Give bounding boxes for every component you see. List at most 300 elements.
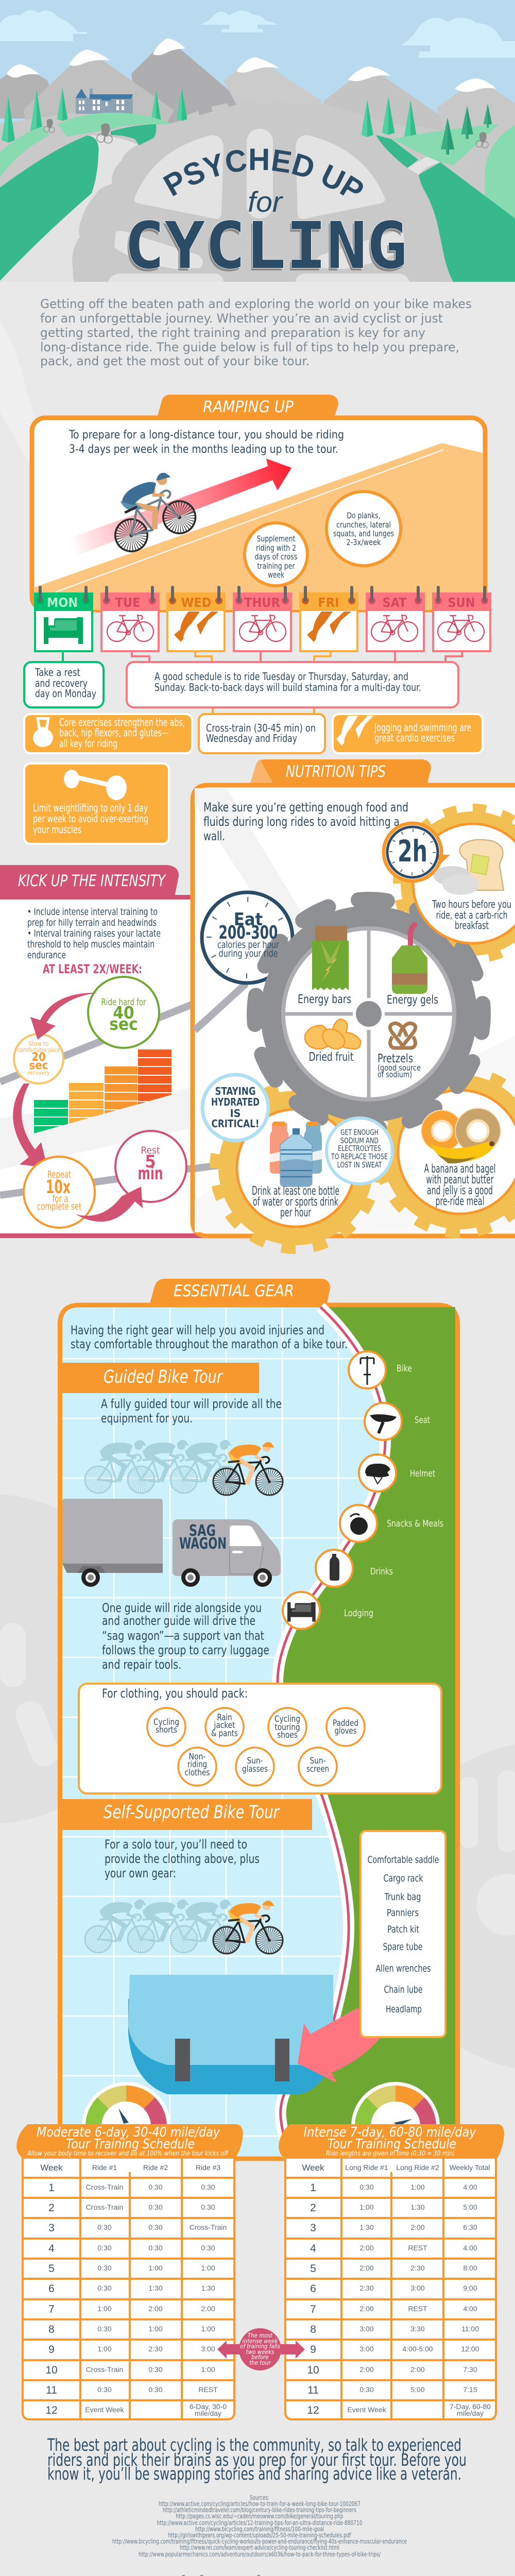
note: monday rest: [24, 662, 104, 707]
note: monday rest: and recovery: [35, 677, 88, 689]
calendar day: WED: WED: [181, 595, 211, 610]
table header: [40, 2163, 220, 2173]
label: pretzels: Pretzels: [377, 1052, 413, 1065]
banner: moderate schedule: Allow your body time to recover and be at 100% when the tour kicks off: [27, 2150, 229, 2158]
calendar day: MON: MON: [47, 595, 78, 610]
table rows: 1:30: [201, 2284, 215, 2292]
icon: pannier bag: [128, 1975, 333, 2094]
gear: bagel: [379, 1071, 515, 1233]
callout: cross training: riding with 2: [256, 543, 296, 553]
week numbers: 6: [310, 2283, 316, 2295]
table rows: REST: [198, 2385, 218, 2394]
week numbers: 11: [307, 2384, 319, 2396]
gauge: moderate: [82, 2082, 170, 2171]
callout: most intense week: The most: [248, 2332, 273, 2339]
clothing item: rain jacket: & pants: [211, 1728, 238, 1739]
table rows: 0:30: [97, 2264, 112, 2272]
table rows: 8:00: [463, 2264, 477, 2272]
icon: toast and eggs: [434, 840, 504, 895]
tip: cross-train: [199, 714, 325, 753]
week numbers: 4: [310, 2243, 316, 2255]
clothing item: padded gloves: [327, 1708, 365, 1746]
table rows: REST: [408, 2244, 427, 2252]
table rows: 0:30: [359, 2183, 374, 2191]
banner: moderate schedule: Moderate 6-day, 30-40 mile/day: [37, 2125, 220, 2140]
table rows: 4:00: [463, 2244, 477, 2252]
week numbers: 6: [48, 2283, 55, 2295]
text block: guided tour: A fully guided tour will provide all the: [101, 1397, 282, 1411]
panel: clothing list: For clothing, you should pack:: [102, 1686, 248, 1701]
tip: cross-train: Cross-train (30-45 min) on: [206, 722, 316, 734]
clothing item: cycling shorts: [147, 1708, 185, 1746]
subheading: at least 2x/week: AT LEAST 2X/WEEK:: [43, 962, 142, 976]
heading tab: kick up the intensity: KICK UP THE INTENSITY: [18, 872, 166, 890]
table rows: [347, 2183, 491, 2417]
gear inner: two hours before: [413, 824, 515, 943]
sources: http://girlswithgears.org/wp-content/uploads/25-50-mile-training-schedules.pdf: [168, 2532, 351, 2539]
table rows: 2:00: [148, 2304, 163, 2313]
week numbers: 9: [48, 2344, 55, 2355]
icon: hotel building: [76, 89, 133, 114]
icon: pretzel: [390, 1023, 416, 1048]
text: pre-ride meal: [424, 1162, 495, 1208]
text block: gear intro: Having the right gear will help you avoid injuries and: [71, 1323, 324, 1337]
text block: nutrition intro: wall.: [203, 829, 225, 843]
text block: guided tour: [101, 1397, 282, 1426]
step: repeat 10x: [24, 1157, 95, 1228]
text block: sag wagon: follows the group to carry luggage: [102, 1643, 269, 1657]
step: rest 5 min: [115, 1131, 186, 1202]
snowcaps: [7, 38, 496, 92]
label: energy gels: Energy gels: [387, 993, 438, 1007]
calendar day: THUR: [233, 592, 292, 651]
callout: cross training: days of cross: [254, 552, 298, 562]
step: rest 5 min: 5: [145, 1151, 156, 1172]
clothing item: touring shoes: touring: [275, 1722, 300, 1733]
title: [123, 148, 407, 286]
sky: [0, 0, 515, 124]
step: slow 20 sec: comfortable pace: [18, 1046, 60, 1054]
callout: sodium and electrolytes: LOST IN SWEAT: [337, 1160, 382, 1170]
sources: http://www.bicycling.com/training/fitness/quick-cycling-workouts-power-and-endurance/flying-40s-enhance-muscular-endurance: [112, 2538, 407, 2545]
table header: Ride #3: [196, 2163, 220, 2172]
table rows: 1:00: [97, 2345, 112, 2353]
tip: cardio: [333, 714, 483, 753]
table rows: 2:00: [410, 2223, 425, 2231]
panel: gear list: [360, 1831, 445, 2037]
callout: sodium and electrolytes: GET ENOUGH: [340, 1128, 379, 1137]
table: intense schedule: [285, 2158, 496, 2419]
callout: staying hydrated: HYDRATED: [211, 1096, 260, 1108]
text: eat calories: calories per hour: [217, 939, 280, 951]
week numbers: 8: [310, 2324, 316, 2335]
trees left: [2, 88, 187, 143]
note: monday rest: day on Monday: [35, 687, 96, 700]
callout: core exercises: 2-3x/week: [346, 537, 381, 547]
label: dried fruit: Dried fruit: [309, 1050, 353, 1064]
table rows: 3:00: [359, 2325, 374, 2333]
weekly calendar: [24, 587, 491, 716]
step: repeat 10x: 10x: [46, 1177, 71, 1198]
hero illustration: [0, 0, 515, 282]
label: energy bars: Energy bars: [298, 993, 351, 1006]
table rows: 2:30: [359, 2284, 374, 2292]
clothing item: non-riding clothes: Non-: [188, 1752, 206, 1762]
table rows: 2:00: [359, 2264, 374, 2272]
panel: nutrition tips: [193, 759, 515, 1249]
gear item: lodging: [283, 1592, 373, 1629]
label: pretzels: [377, 1052, 421, 1079]
table rows: mile/day: [195, 2409, 221, 2417]
table rows: 11:00: [461, 2325, 479, 2333]
tip: core exercises: back, hip flexors, and glutes—: [59, 726, 169, 739]
calendar binding pins: [37, 587, 488, 604]
icon: sag wagon van: [173, 1519, 281, 1587]
week numbers: 2: [48, 2202, 55, 2214]
callout: sodium and electrolytes: ELECTROLYTES: [338, 1144, 381, 1153]
closing text: [47, 2435, 467, 2484]
callout: staying hydrated: IS: [230, 1107, 241, 1120]
icon: cyclist group solo: [85, 1900, 283, 1954]
tip: cardio: great cardio exercises: [374, 732, 455, 744]
table rows: Event Week: [347, 2405, 387, 2414]
table rows: 7:15: [463, 2385, 477, 2394]
ramp: [35, 443, 483, 610]
clothing item: sunscreen: [299, 1748, 337, 1786]
table rows: 2:00: [359, 2365, 374, 2374]
week numbers: [45, 2182, 58, 2416]
tip: core exercises: [24, 714, 192, 753]
step: repeat 10x: complete set: [37, 1201, 81, 1212]
icon: truck trailer: [62, 1499, 163, 1587]
callout: sodium and electrolytes: [327, 1118, 392, 1184]
arrow: 20 sec to repeat: [13, 1083, 47, 1168]
icon: running legs: [336, 716, 374, 746]
sources: http://www.popularmechanics.com/adventure/outdoors/a6036/how-to-pack-for-three-types-of-bike-trips/: [139, 2551, 381, 2558]
sources: [112, 2494, 407, 2558]
table rows: 2:30: [148, 2345, 163, 2353]
panel: gear list: Trunk bag: [384, 1891, 421, 1903]
text block: interval training: [27, 906, 161, 961]
clothing item: non-riding clothes: riding: [187, 1759, 207, 1770]
title line: CYCLING: CYCLING: [124, 209, 407, 283]
callout: sodium and electrolytes: TO REPLACE THOSE: [331, 1152, 388, 1161]
week numbers: 8: [48, 2324, 55, 2335]
text: eat calories: Eat: [234, 909, 263, 930]
intro text: Getting off the beaten path and exploring the world on your bike makes: [40, 297, 472, 311]
clothing item: padded gloves: gloves: [335, 1726, 357, 1736]
table rows: 1:00: [148, 2325, 163, 2333]
calendar day: TUE: TUE: [115, 595, 140, 610]
text block: gear intro: [71, 1323, 348, 1351]
text block: sag wagon: [102, 1601, 269, 1672]
table rows: 2:00: [359, 2304, 374, 2313]
week numbers: 5: [48, 2263, 55, 2275]
step: repeat 10x: Repeat: [47, 1169, 71, 1180]
gear: two hours before: [398, 808, 515, 959]
table rows: mile/day: [457, 2409, 484, 2417]
table rows: 4:00-5:00: [402, 2345, 433, 2353]
week numbers: 4: [48, 2243, 55, 2255]
table rows: 4:00: [463, 2304, 477, 2313]
clothing item: sunglasses: Sun-: [247, 1756, 263, 1766]
callout: core exercises: [327, 492, 401, 566]
banner: self-supported bike tour: [62, 1799, 312, 1830]
background chainring: [0, 103, 489, 282]
text block: solo tour: For a solo tour, you’ll need to: [105, 1837, 247, 1852]
step: ride hard 40 sec: Ride hard for: [101, 997, 146, 1008]
text: drink water: Drink at least one bottle: [252, 1184, 339, 1198]
table rows: 3:30: [410, 2325, 425, 2333]
panel: clothing list: [79, 1684, 441, 1793]
clothing item: sunscreen: Sun-: [310, 1756, 325, 1766]
icon: bagels and banana: [421, 1108, 501, 1163]
week numbers: 7: [48, 2303, 55, 2315]
table rows: 2:00: [201, 2304, 215, 2313]
table header: Ride #2: [143, 2163, 168, 2172]
week numbers: [307, 2182, 319, 2416]
icon: sag wagon van: WAGON: [179, 1535, 227, 1553]
table header: Weekly Total: [450, 2163, 490, 2172]
table rows: 6-Day, 30-0: [190, 2402, 227, 2411]
clock: 2h: 2h: [398, 834, 427, 869]
week numbers: 1: [48, 2182, 55, 2194]
step: slow 20 sec: Slow to: [28, 1040, 49, 1047]
step: slow 20 sec: 20: [31, 1051, 46, 1064]
text: drink water: of water or sports drink: [253, 1195, 338, 1209]
gear item: snacks: [340, 1505, 443, 1542]
tip: cross-train: Wednesday and Friday: [206, 732, 297, 744]
clothing item: touring shoes: [268, 1708, 306, 1746]
table: moderate schedule: [23, 2158, 234, 2419]
callout: core exercises: crunches, lateral: [336, 520, 391, 530]
text block: sag wagon: One guide will ride alongside you: [102, 1601, 262, 1615]
icon: dumbbell: [64, 770, 127, 800]
tip: weightlifting: your muscles: [33, 823, 81, 836]
table rows: 1:30: [410, 2203, 425, 2211]
week numbers: 10: [307, 2364, 319, 2376]
callout: staying hydrated: CRITICAL!: [211, 1117, 260, 1130]
panel: gear list: Cargo rack: [383, 1873, 423, 1884]
calendar day: SUN: SUN: [448, 595, 475, 610]
callout: cross training: Supplement: [256, 534, 296, 544]
clock: eat calories: [202, 892, 293, 983]
week numbers: 10: [45, 2364, 58, 2376]
step: ride hard 40 sec: 40: [113, 1003, 134, 1023]
table rows: 1:00: [201, 2365, 215, 2374]
intro text: pack, and get the most out of your bike tour.: [40, 354, 310, 368]
trees right: [361, 97, 416, 137]
label: pretzels: (good source: [377, 1063, 421, 1073]
step: slow 20 sec: sec: [29, 1059, 48, 1072]
text: drink water: per hour: [280, 1206, 311, 1219]
text: eat calories: 200-300: [218, 922, 278, 943]
intro text: getting started, the right training and preparation is key for any: [40, 326, 425, 340]
calendar day: SUN: [432, 592, 491, 651]
table rows: [85, 2183, 227, 2417]
sources: Sources:: [250, 2494, 269, 2501]
tip: core exercises: Core exercises strengthen the abs,: [59, 716, 185, 728]
callout: staying hydrated: [202, 1075, 268, 1141]
clothing item: touring shoes: Cycling: [274, 1714, 300, 1724]
table rows: 6:30: [463, 2223, 477, 2231]
table rows: 1:30: [359, 2223, 374, 2231]
week numbers: 5: [310, 2263, 316, 2275]
text block: riding frequency: To prepare for a long-distance tour, you should be riding: [68, 429, 344, 442]
icon: kettlebell: [33, 717, 53, 747]
table rows: 0:30: [97, 2244, 112, 2252]
table header: Week: [302, 2163, 324, 2173]
bar chart: interval intensity: [34, 1049, 171, 1134]
table rows: Cross-Train: [86, 2183, 123, 2191]
calendar day: WED: [166, 592, 226, 651]
callout: staying hydrated: STAYING: [215, 1085, 255, 1097]
text: two hours before you ride: [432, 898, 511, 931]
intro text: long-distance ride. The guide below is full of tips to help you prepare,: [40, 340, 459, 354]
text block: sag wagon: and repair tools.: [102, 1657, 181, 1672]
text: eat calories: during your ride: [218, 948, 278, 959]
text block: gear intro: stay comfortable throughout the marathon of a bike tour.: [71, 1337, 348, 1351]
table rows: 0:30: [201, 2244, 215, 2252]
tip: core exercises: all key for riding: [59, 737, 117, 750]
background chainring shapes: [0, 319, 515, 2071]
text: drink water: [252, 1184, 339, 1219]
clothing item: sunglasses: glasses: [242, 1764, 268, 1774]
table rows: 3:00: [359, 2345, 374, 2353]
clothing item: rain jacket: jacket: [214, 1720, 235, 1731]
icon: water bottles: [270, 1122, 322, 1187]
table rows: 0:30: [201, 2203, 215, 2211]
table rows: Cross-Train: [86, 2203, 123, 2211]
table rows: 5:00: [463, 2203, 477, 2211]
callout: most intense week: intense week: [243, 2337, 278, 2345]
clothing item: sunglasses: [236, 1748, 274, 1786]
panel: gear list: Spare tube: [383, 1941, 422, 1953]
intro text: [40, 297, 472, 368]
tip: weightlifting: per week to avoid over-exerting: [33, 812, 148, 825]
week numbers: 11: [46, 2384, 57, 2396]
week numbers: 9: [310, 2344, 316, 2355]
table rows: 0:30: [97, 2385, 112, 2394]
week numbers: 12: [45, 2404, 58, 2416]
panel: essential gear: [60, 1279, 457, 2159]
week numbers: 12: [307, 2404, 319, 2416]
text block: nutrition intro: fluids during long rides to avoid hitting a: [203, 815, 400, 829]
heading tab: nutrition tips: [250, 759, 431, 783]
table rows: 1:30: [148, 2284, 163, 2292]
table rows: 2:00: [359, 2244, 374, 2252]
table rows: 1:00: [201, 2264, 215, 2272]
icon: cyclist on ramp: [99, 467, 200, 556]
banner: intense schedule: Intense 7-day, 60-80 mile/day: [304, 2125, 477, 2140]
heading tab: ramping up: RAMPING UP: [203, 398, 294, 416]
tip: weightlifting: [24, 764, 169, 844]
table rows: 12:00: [461, 2345, 479, 2353]
gear item: helmet: Helmet: [410, 1468, 435, 1479]
note: ride schedule: Sunday. Back-to-back days will build stamina for a multi-day tour.: [154, 681, 421, 693]
gear item: seat: Seat: [415, 1415, 430, 1426]
panel: gear list: Allen wrenches: [376, 1963, 431, 1974]
table rows: 1:00: [359, 2203, 374, 2211]
table rows: 0:30: [148, 2244, 163, 2252]
heading tab: essential gear: ESSENTIAL GEAR: [174, 1282, 294, 1300]
icon: small cyclists: [44, 119, 488, 148]
text: pre-ride meal: pre-ride meal: [436, 1195, 484, 1208]
gear item: helmet: [359, 1454, 435, 1492]
arrow: 40 sec to 20 sec: [30, 993, 98, 1040]
mountains: [0, 38, 515, 137]
table rows: 3:00: [410, 2284, 425, 2292]
table rows: 0:30: [97, 2325, 112, 2333]
icon: dried fruit: [305, 1019, 360, 1049]
panel: gear list: Chain lube: [384, 1984, 422, 1995]
table rows: 0:30: [359, 2385, 374, 2394]
callout: core exercises: Do planks,: [347, 511, 380, 520]
text block: sag wagon: and another guide will drive the: [102, 1614, 255, 1628]
table rows: 1:00: [97, 2304, 112, 2313]
step: slow 20 sec: [14, 1034, 63, 1083]
arrow: gear list to bag: [298, 2008, 380, 2083]
table rows: 1:00: [410, 2183, 425, 2191]
table rows: 0:30: [97, 2223, 112, 2231]
text block: nutrition intro: Make sure you’re getting enough food and: [203, 800, 408, 815]
hills right: [376, 104, 515, 282]
week numbers: 7: [310, 2303, 316, 2315]
text: two hours before you ride: breakfast: [455, 919, 489, 931]
icon: energy gel: [392, 925, 427, 994]
week numbers: 3: [48, 2222, 55, 2234]
banner: self-supported bike tour: Self-Supported Bike Tour: [104, 1802, 280, 1823]
callout: most intense week: of training falls: [240, 2343, 280, 2350]
banner: guided bike tour: [62, 1363, 259, 1393]
banner: moderate schedule: [16, 2124, 243, 2159]
callout: cross training: training per: [258, 561, 295, 571]
note: ride schedule: A good schedule is to ride Tuesday or Thursday, Saturday, and: [154, 670, 408, 683]
calendar day: MON: [34, 592, 93, 651]
table header: Ride #1: [92, 2163, 117, 2172]
table rows: 9:00: [463, 2284, 477, 2292]
calendar day: FRI: FRI: [318, 595, 339, 610]
step: rest 5 min: min: [138, 1163, 163, 1184]
step: ride hard 40 sec: [88, 977, 159, 1048]
text block: guided tour: equipment for you.: [101, 1411, 193, 1426]
table rows: 1:00: [201, 2325, 215, 2333]
banner: intense schedule: Ride lengths are given in time (0:30 = 30 min): [326, 2150, 455, 2158]
gear item: snacks: Snacks & Meals: [387, 1518, 443, 1529]
text block: riding frequency: 3-4 days per week in the months leading up to the tour.: [69, 443, 338, 456]
table rows: 0:30: [148, 2385, 163, 2394]
text: eat calories: [217, 909, 280, 959]
gear item: lodging: Lodging: [344, 1608, 373, 1619]
text block: solo tour: provide the clothing above, plus: [105, 1852, 260, 1866]
icon: cyclist group: [85, 1440, 283, 1495]
connectors: [63, 652, 462, 716]
heading tab: ramping up: [158, 395, 338, 416]
table rows: 0:30: [148, 2203, 163, 2211]
title: CYCLING: [123, 211, 406, 286]
icon: sag wagon van: SAG: [189, 1522, 216, 1540]
table rows: 5:00: [410, 2385, 425, 2394]
sources: http://www.active.com/cycling/articles/how-to-train-for-a-week-long-bike-tour-1002067: [159, 2500, 360, 2507]
intro text: for an unforgettable journey. Whether you’re an avid cyclist or just: [40, 311, 443, 326]
gear item: bike: [349, 1351, 412, 1388]
gear item: drinks: Drinks: [370, 1566, 393, 1577]
table rows: 0:30: [148, 2183, 163, 2191]
calendar day: THUR: THUR: [244, 595, 280, 610]
week numbers: 1: [310, 2182, 316, 2194]
table rows: 2:00: [410, 2365, 425, 2374]
week numbers: 3: [310, 2222, 316, 2234]
